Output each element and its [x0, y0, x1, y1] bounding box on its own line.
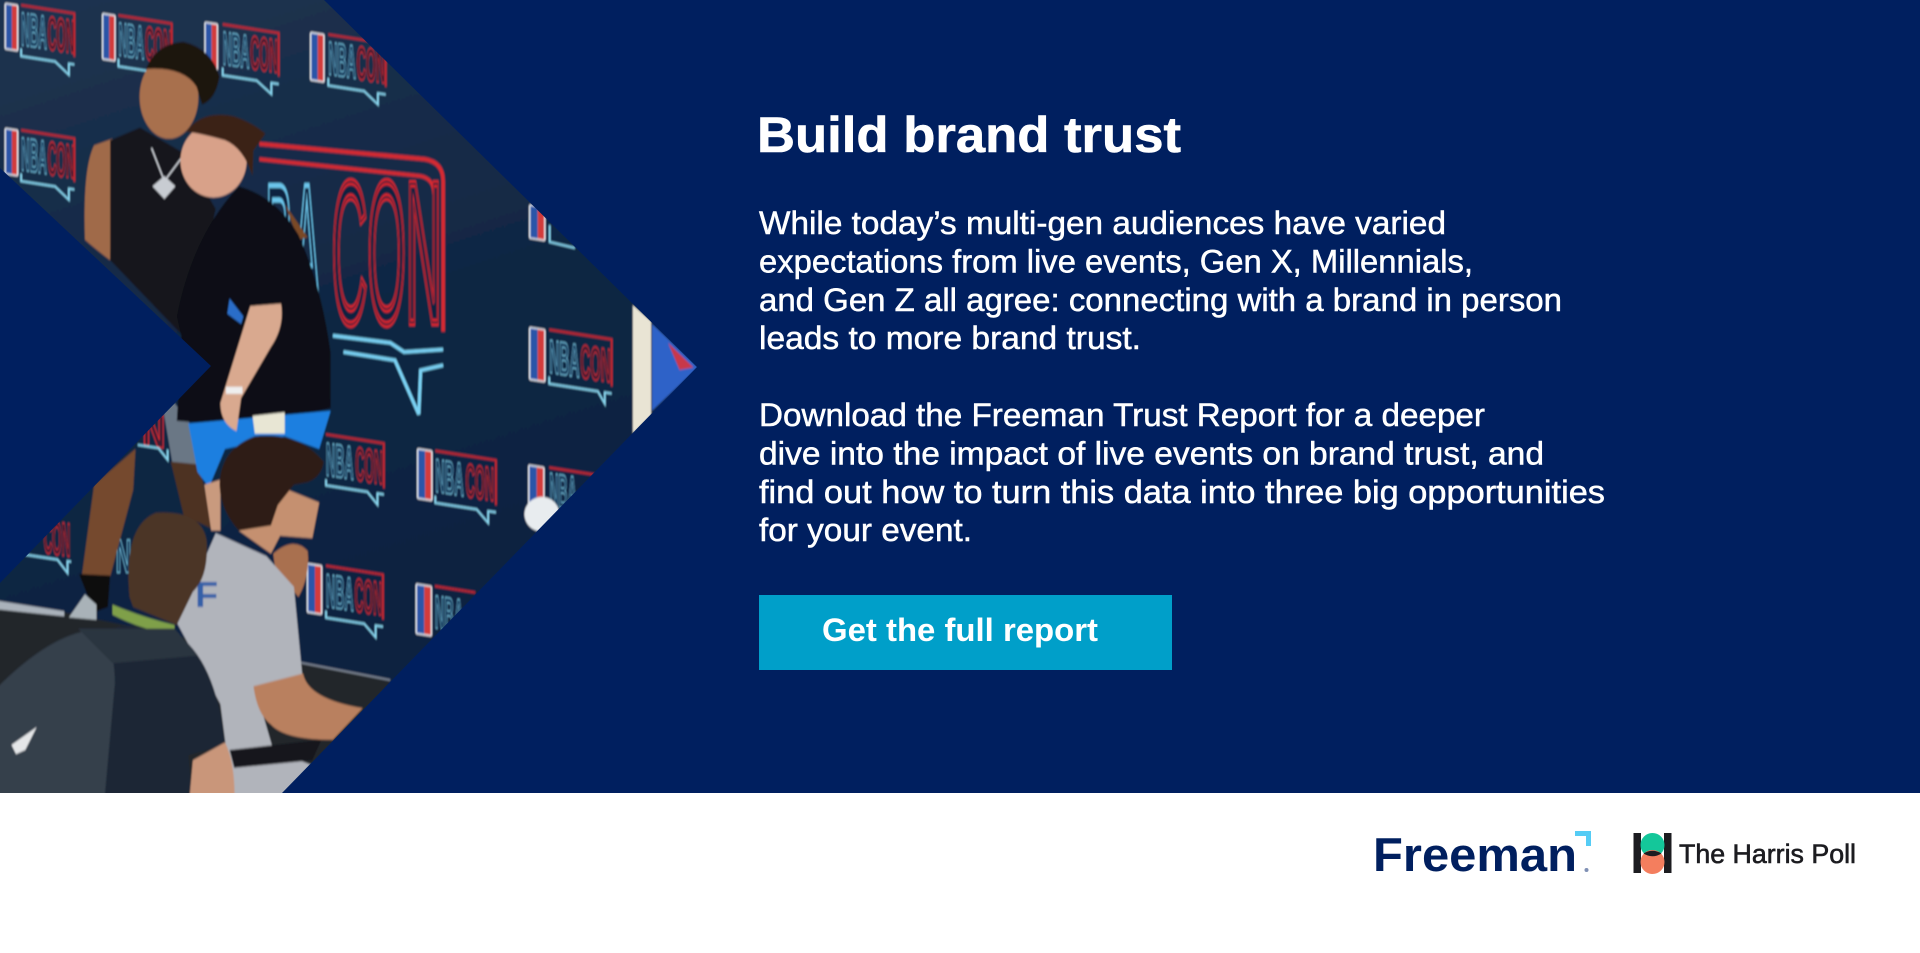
paragraph: multi-gen audiences [759, 205, 1562, 356]
logo: The Harris Poll [1634, 833, 1856, 874]
button: get the full report [759, 595, 1172, 670]
person: man with backpack [0, 513, 235, 811]
person: seated man in grey t-shirt with curly hair: F [195, 576, 218, 616]
photo: chevron-cropped NBA Con photo: CON [355, 437, 383, 495]
photo: chevron-cropped NBA Con photo: NBA [326, 432, 354, 490]
logo: Freeman: Freeman [1373, 828, 1577, 881]
photo: chevron-cropped NBA Con photo: CON [332, 140, 442, 366]
photo: chevron-cropped NBA Con photo: NBA [21, 2, 47, 59]
photo: chevron-cropped NBA Con photo: NBA [435, 449, 464, 507]
person: woman in black t-shirt [177, 115, 331, 487]
photo: chevron-cropped NBA Con photo: NBA [326, 564, 354, 621]
paragraph: download the report: Download the Freeman Trust Report for a deeper [759, 397, 1485, 433]
photo: chevron-cropped NBA Con photo: CON [44, 509, 70, 567]
photo: chevron-cropped NBA Con photo: CON [580, 335, 611, 393]
photo: chevron-cropped NBA Con photo: CON [466, 454, 494, 511]
photo: chevron-cropped NBA Con photo: NBA [435, 585, 463, 643]
paragraph: download the report [759, 397, 1605, 548]
photo: chevron-cropped NBA Con photo: CON [357, 36, 385, 94]
paragraph: multi-gen audiences: leads to more brand trust. [759, 320, 1141, 356]
paragraph: download the report: for your event. [759, 512, 972, 548]
photo: chevron-cropped NBA Con photo: N [142, 402, 165, 459]
title: Build brand trust [757, 107, 1181, 163]
photo: chevron-cropped NBA Con photo: N [116, 531, 131, 583]
paragraph: multi-gen audiences: While today’s multi-gen audiences have varied [759, 205, 1446, 241]
photo: chevron-cropped NBA Con photo: CON [250, 26, 278, 83]
photo: chevron-cropped NBA Con photo [0, 0, 748, 811]
photo: chevron-cropped NBA Con photo: NBA [328, 31, 356, 89]
photo: chevron-cropped NBA Con photo: CON [48, 131, 74, 189]
photo: chevron-cropped NBA Con photo: NBA [549, 330, 580, 388]
paragraph: download the report: find out how to turn this data into three big opportunities [759, 474, 1605, 510]
paragraph: multi-gen audiences: and Gen Z all agree: connecting with a brand in person [759, 282, 1562, 318]
paragraph: multi-gen audiences: expectations from live events, Gen X, Millennials, [759, 244, 1473, 280]
photo: chevron-cropped NBA Con photo: CON [145, 16, 172, 74]
big neon NBA CON sign [259, 140, 443, 414]
photo: chevron-cropped NBA Con photo: CON [332, 140, 442, 366]
photo: chevron-cropped NBA Con photo: CON [355, 568, 382, 626]
photo: chevron-cropped NBA Con photo: NBA [549, 462, 577, 520]
logo: The Harris Poll: The Harris Poll [1679, 839, 1856, 869]
person: man in black tank [69, 42, 219, 620]
big neon NBA CON sign: BA [265, 144, 321, 361]
button: get the full report: Get the full report [822, 612, 1098, 648]
person: seated man in grey t-shirt with curly hair [177, 435, 363, 811]
photo: chevron-cropped NBA Con photo: NBA [21, 127, 47, 184]
photo: chevron-cropped NBA Con photo: NBA [118, 12, 144, 70]
photo: chevron-cropped NBA Con photo: NBA [223, 21, 249, 79]
photo: chevron-cropped NBA Con photo: CON [48, 6, 74, 64]
paragraph: download the report: dive into the impact of live events on brand trust, and [759, 436, 1544, 472]
